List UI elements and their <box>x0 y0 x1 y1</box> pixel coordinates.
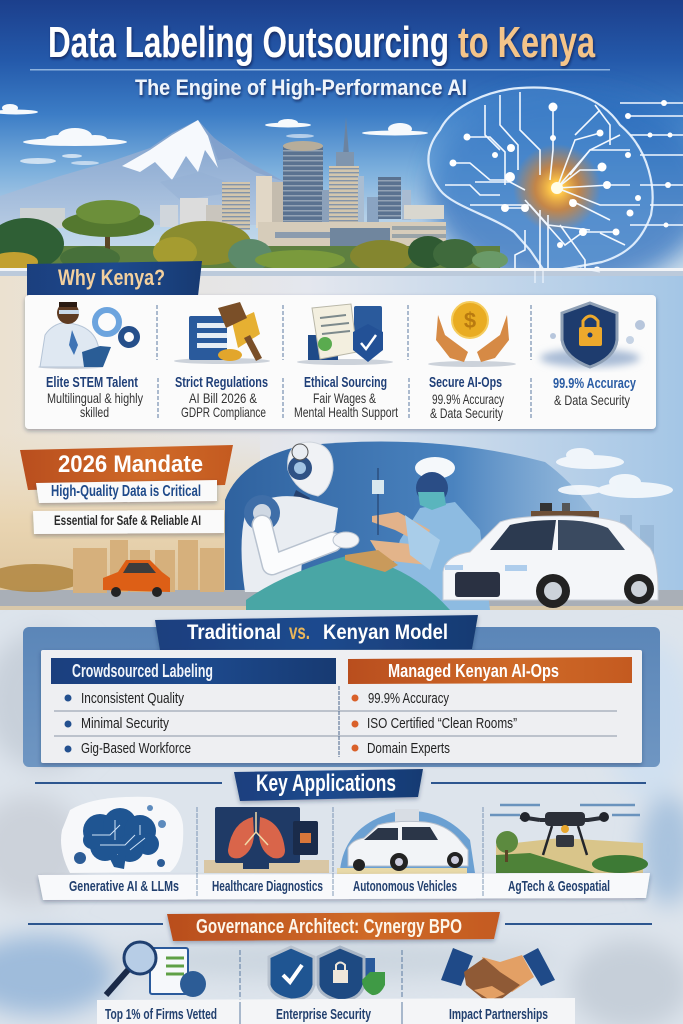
text: elite STEM talent: Multilingual & highly <box>47 390 143 406</box>
illustration: autonomous white car <box>443 503 658 608</box>
text: elite STEM talent: skilled <box>80 404 109 420</box>
column: crowdsourced labeling: Inconsistent Quality <box>81 690 184 707</box>
icon: handshake <box>441 948 555 1000</box>
heading: governance: Governance Architect: Cynergy BPO <box>196 916 462 938</box>
title: to Kenya <box>458 18 595 67</box>
text: ethical sourcing: Ethical Sourcing <box>304 374 387 391</box>
text: elite STEM talent: Elite STEM Talent <box>46 374 138 391</box>
callout: high-quality data <box>36 480 217 503</box>
heading: traditional vs Kenyan: Kenyan Model <box>323 621 448 644</box>
text: ethical sourcing: Mental Health Support <box>294 404 398 420</box>
panel: governance architect <box>28 912 652 1024</box>
illustration: robot <box>242 442 359 592</box>
icon: security shield <box>540 303 645 367</box>
icon: autonomous vehicle <box>337 809 475 874</box>
illustration: surgeon <box>370 457 490 610</box>
callout: high-quality data: High-Quality Data is Critical <box>51 483 201 500</box>
column: crowdsourced labeling: Crowdsourced Labeling <box>72 661 213 681</box>
heading: why Kenya: Why Kenya? <box>58 265 165 290</box>
heading: 2026 mandate: 2026 Mandate <box>58 451 203 478</box>
text: secure AI-ops <box>429 374 504 421</box>
icon: ethical document and shield <box>297 304 393 365</box>
label strip: governance: Impact Partnerships <box>449 1006 548 1023</box>
heading: traditional vs Kenyan: vs. <box>289 621 310 644</box>
text: strict regulations: Strict Regulations <box>175 374 268 391</box>
text: secure AI-ops: Secure AI-Ops <box>429 374 502 391</box>
label strip: governance <box>97 998 575 1024</box>
column: managed Kenyan AI-ops: Domain Experts <box>367 740 450 757</box>
icon: enterprise shields <box>269 947 385 1001</box>
label strip: applications: Autonomous Vehicles <box>353 878 457 895</box>
icon: generative AI brain <box>61 797 183 873</box>
panel: 2026 mandate scene <box>0 432 683 610</box>
column: crowdsourced labeling: Gig-Based Workforce <box>81 740 191 757</box>
text: ethical sourcing: Fair Wages & <box>313 390 376 406</box>
label strip: governance: Top 1% of Firms Vetted <box>105 1006 217 1023</box>
text: secure AI-ops: & Data Security <box>430 405 503 421</box>
icon: hands and coin: $ <box>464 308 476 333</box>
text: secure AI-ops: 99.9% Accuracy <box>432 391 504 407</box>
text: strict regulations <box>175 374 268 420</box>
text: accuracy <box>553 375 636 408</box>
callout: safe and reliable AI <box>33 510 224 534</box>
trees and ground <box>0 200 508 272</box>
icon: healthcare lungs monitor <box>204 807 329 873</box>
text: elite STEM talent <box>46 374 143 420</box>
label strip: applications: Generative AI & LLMs <box>69 878 179 895</box>
clouds <box>0 104 428 165</box>
callout: safe and reliable AI: Essential for Safe & Reliable AI <box>54 512 201 528</box>
heading: 2026 mandate <box>20 445 233 490</box>
icon: agtech drone <box>490 805 648 873</box>
icon: hands and coin <box>428 302 516 367</box>
heading: traditional vs Kenyan: Traditional <box>187 621 281 644</box>
text: accuracy: 99.9% Accuracy <box>553 375 636 392</box>
text: accuracy: & Data Security <box>554 392 630 408</box>
scene backdrop <box>0 432 683 610</box>
label strip: governance: Enterprise Security <box>276 1006 371 1023</box>
illustration: city and orange car <box>0 540 224 597</box>
column: crowdsourced labeling <box>51 658 336 757</box>
panel: key applications <box>35 769 650 900</box>
label strip: applications: AgTech & Geospatial <box>508 878 610 895</box>
heading: governance <box>28 912 652 941</box>
hero: sky and skyline <box>0 0 683 290</box>
icon: magnifier vetting <box>106 942 206 997</box>
label strip: applications <box>38 807 650 900</box>
white card <box>25 295 656 429</box>
label strip: applications: Healthcare Diagnostics <box>212 878 323 895</box>
panel: traditional vs Kenyan model <box>23 615 660 767</box>
column: managed Kenyan AI-ops: 99.9% Accuracy <box>368 690 449 707</box>
title: Data Labeling Outsourcing <box>48 18 449 67</box>
icon: scientist with tablet <box>38 302 137 369</box>
subtitle: The Engine of High-Performance AI <box>135 75 467 100</box>
panel: why Kenya <box>25 261 656 429</box>
column: managed Kenyan AI-ops: ISO Certified “Clean Rooms” <box>367 715 517 732</box>
icon: circuit brain <box>428 87 683 273</box>
illustration: patient blanket <box>246 555 450 610</box>
text: strict regulations: AI Bill 2026 & <box>189 390 258 406</box>
heading: traditional vs Kenyan <box>155 615 478 650</box>
column: crowdsourced labeling: Minimal Security <box>81 715 169 732</box>
comparison card <box>41 650 642 763</box>
icon: gavel and documents <box>174 302 270 364</box>
mountain <box>0 120 295 225</box>
heading: key applications <box>35 769 646 801</box>
text: strict regulations: GDPR Compliance <box>181 404 266 420</box>
text: ethical sourcing <box>294 374 398 420</box>
heading: why Kenya <box>27 261 202 297</box>
column: managed Kenyan AI-ops: Managed Kenyan AI-Ops <box>388 661 559 681</box>
background: lower page <box>0 600 683 1024</box>
section background: why Kenya and mandate <box>0 268 683 610</box>
brain stem overlay <box>535 268 600 283</box>
buildings <box>20 117 446 250</box>
column: managed Kenyan AI-ops <box>348 657 632 757</box>
heading: key applications: Key Applications <box>256 770 396 797</box>
